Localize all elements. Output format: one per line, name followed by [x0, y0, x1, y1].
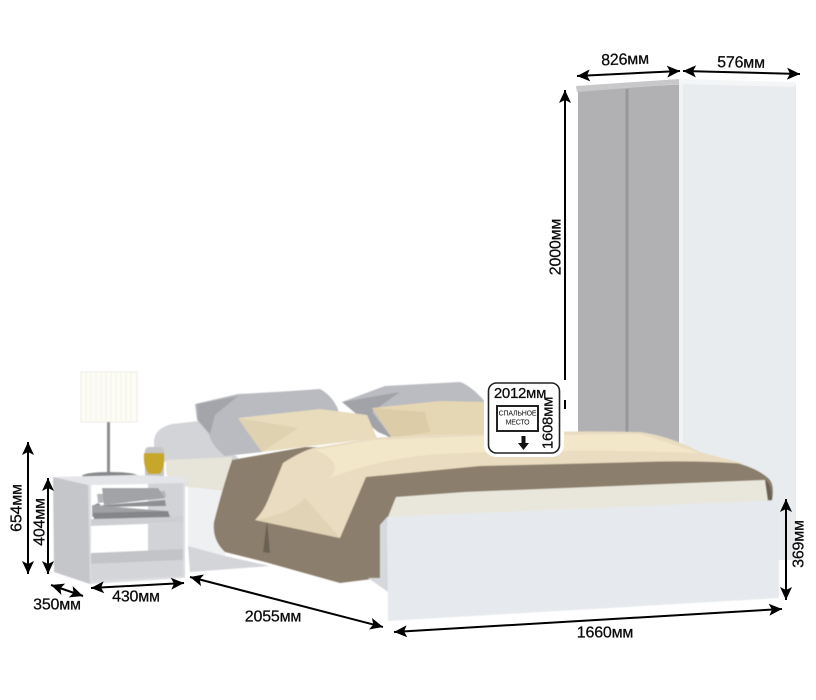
- grey pillow right: [342, 382, 488, 440]
- bed inner side: [368, 517, 388, 592]
- dimension arrows: [28, 71, 800, 632]
- arrow: wardrobe depth: [683, 71, 800, 74]
- label: 654: 654мм: [8, 484, 26, 532]
- arrow: wardrobe height: [564, 90, 566, 380]
- arrow: nightstand width: [91, 583, 184, 588]
- headboard: [154, 421, 240, 462]
- cream pillow left: [238, 409, 377, 452]
- nightstand with lamp: [53, 372, 187, 584]
- callout: sleeping place: [484, 379, 564, 457]
- sleeping place box: МЕСТО: [506, 420, 530, 426]
- lamp shade: [81, 372, 137, 422]
- label: 350: 350мм: [33, 596, 81, 614]
- callout width: 2012мм: [494, 385, 546, 402]
- label: 1660: 1660мм: [577, 624, 633, 642]
- label: 430: 430мм: [112, 588, 160, 606]
- arrow: nightstand depth: [51, 585, 83, 596]
- sleeping place box: СПАЛЬНОЕ: [499, 410, 537, 418]
- lamp cord: [107, 524, 108, 548]
- brown blanket: [214, 447, 773, 583]
- label: 826: 826мм: [601, 51, 649, 69]
- cream pillow right: [372, 401, 488, 438]
- arrow: nightstand height: [47, 478, 49, 574]
- bed side rail: [188, 485, 228, 556]
- footboard: [387, 500, 779, 621]
- arrow: wardrobe height lower segment: [564, 400, 566, 409]
- label: 2055: 2055мм: [245, 608, 301, 626]
- left mattress: [166, 457, 232, 491]
- label: 404: 404мм: [32, 498, 48, 546]
- down arrow icon: [518, 436, 529, 450]
- glass: [144, 447, 164, 478]
- lamp stem and base: [107, 422, 110, 475]
- arrow: bed height: [785, 499, 787, 600]
- sleeping place box: [497, 406, 538, 431]
- label: 369: 369мм: [790, 520, 808, 568]
- grey pillow left: [195, 389, 345, 456]
- arrow: wardrobe width: [577, 71, 680, 76]
- arrow: bed length: [190, 577, 383, 627]
- arrow: lamp total height: [27, 442, 29, 574]
- books: [92, 488, 170, 519]
- label: 2000: 2000мм: [548, 219, 564, 275]
- cream duvet: [255, 431, 745, 538]
- arrow: bed width: [394, 609, 782, 632]
- callout length: 1608мм: [540, 397, 556, 449]
- mattress front: [388, 480, 768, 517]
- wardrobe: [576, 79, 796, 560]
- label: 576: 576мм: [717, 54, 765, 72]
- nightstand body: [53, 475, 187, 584]
- bed: [154, 382, 779, 621]
